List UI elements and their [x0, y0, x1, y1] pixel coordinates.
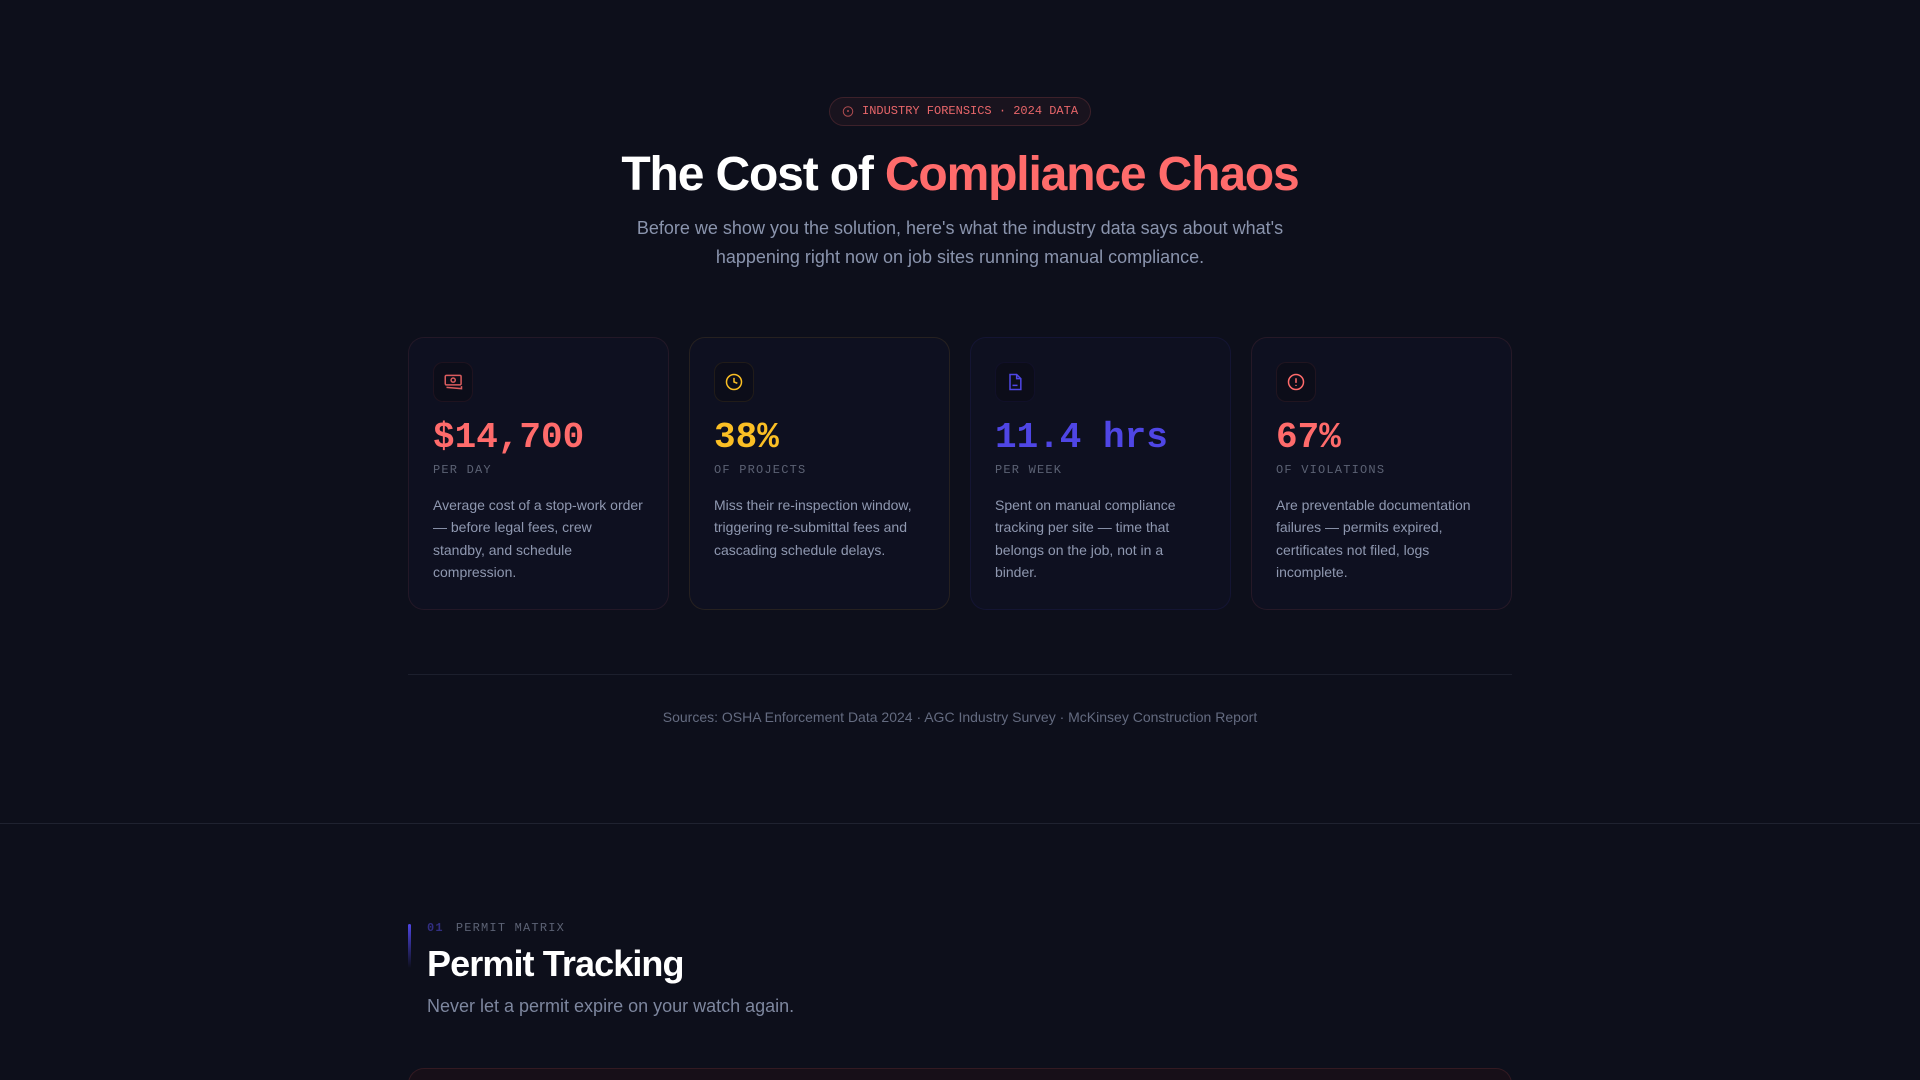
- description: Are preventable documentation failures — permits expired, certificates not filed, logs incomplete.: [1276, 497, 1471, 580]
- sources note: Sources: OSHA Enforcement Data 2024 · AGC Industry Survey · McKinsey Construction Report: [663, 709, 1257, 725]
- icon: banknotes: [433, 362, 473, 402]
- icon: clock: [714, 362, 754, 402]
- stat unit: PER WEEK: [995, 463, 1062, 477]
- subtitle: happening right now on job sites running manual compliance.: [716, 247, 1204, 267]
- subtitle: [637, 218, 1283, 267]
- stat value: 67%: [1276, 417, 1341, 458]
- panel: stat violations: [1251, 337, 1512, 610]
- hero badge: INDUSTRY FORENSICS · 2024 DATA: [862, 104, 1078, 118]
- stat unit: OF VIOLATIONS: [1276, 463, 1385, 477]
- stat value: $14,700: [433, 417, 584, 458]
- subtitle: Before we show you the solution, here's what the industry data says about what's: [637, 218, 1283, 238]
- section heading: Permit Tracking: [427, 943, 684, 984]
- icon: badge alert: [842, 106, 854, 117]
- hero badge: [829, 97, 1091, 126]
- icon: document: [995, 362, 1035, 402]
- panel: permit matrix (cut off): [408, 1068, 1512, 1080]
- description: Average cost of a stop-work order — before legal fees, crew standby, and schedule compression.: [433, 497, 643, 580]
- panel: stat hours: [970, 337, 1231, 610]
- description: Miss their re-inspection window, triggering re-submittal fees and cascading schedule delays.: [714, 497, 912, 558]
- stat unit: OF PROJECTS: [714, 463, 806, 477]
- description: Spent on manual compliance tracking per site — time that belongs on the job, not in a binder.: [995, 497, 1176, 580]
- icon: alert circle: [1276, 362, 1316, 402]
- section subtitle: Never let a permit expire on your watch again.: [427, 996, 794, 1016]
- title: The Cost of Compliance Chaos: [621, 148, 1299, 201]
- stat value: 38%: [714, 417, 779, 458]
- accent bar: [408, 924, 411, 968]
- stat unit: PER DAY: [433, 463, 492, 477]
- section eyebrow: 01 PERMIT MATRIX: [427, 921, 565, 935]
- section header: permit tracking: [408, 921, 794, 1016]
- stat value: 11.4 hrs: [995, 417, 1168, 458]
- panel: stat projects: [689, 337, 950, 610]
- panel: stat cost per day: [408, 337, 669, 610]
- panel top edge: [408, 1068, 1512, 1080]
